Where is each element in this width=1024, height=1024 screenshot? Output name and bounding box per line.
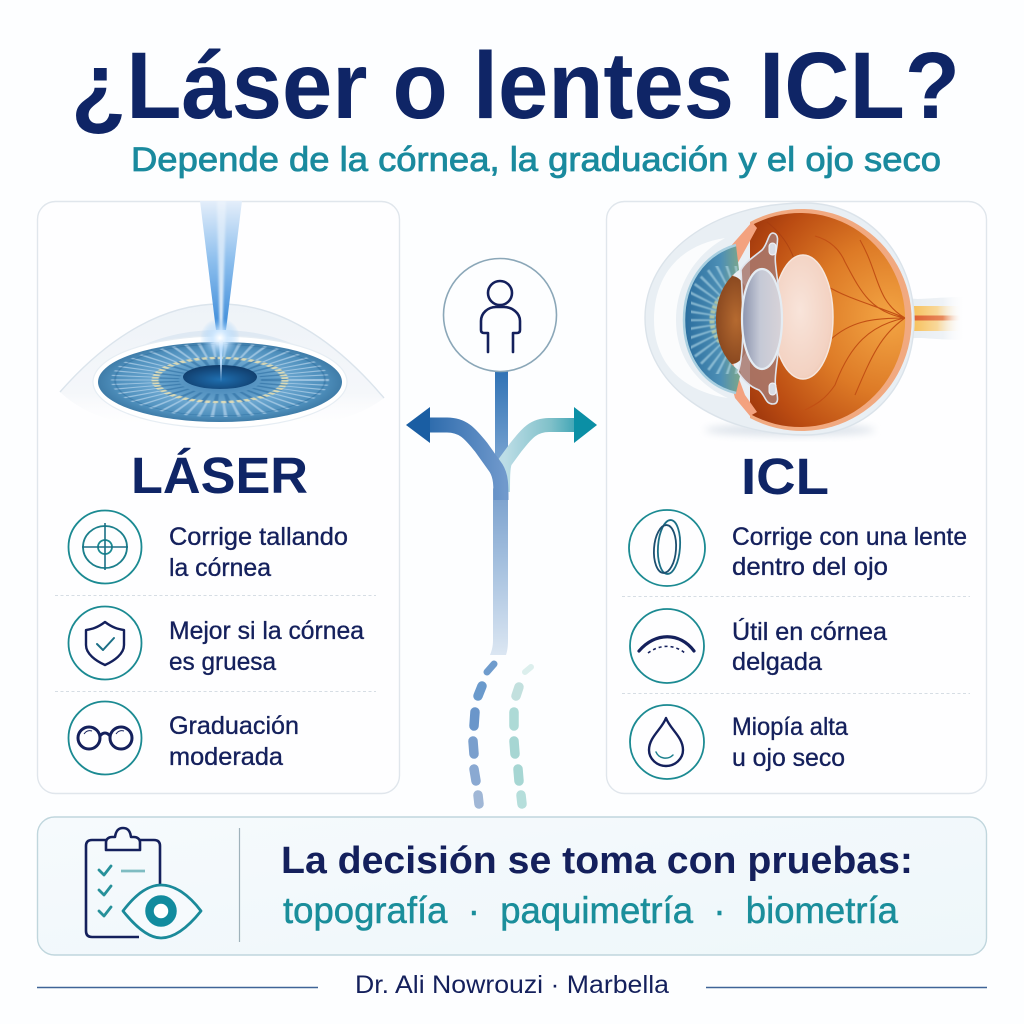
- text: corrige tallando: Corrige tallando: [169, 523, 348, 551]
- text: graduación moderada: [169, 712, 299, 771]
- text: útil en córnea: [732, 617, 887, 676]
- text: mejor si la córnea: [169, 617, 364, 676]
- text: miopía alta: Miopía alta: [732, 713, 848, 741]
- text: decision: La decisión se toma con pruebas:: [281, 840, 913, 882]
- heading: láser: LÁSER: [131, 447, 308, 504]
- text: corrige con una lente: Corrige con una lente: [732, 523, 967, 551]
- text: corrige con una lente: dentro del ojo: [732, 553, 888, 581]
- text: corrige tallando: la córnea: [169, 554, 271, 582]
- panel: icl: [606, 202, 986, 794]
- illustration: eye cross-section with ICL: [645, 203, 968, 436]
- title: ¿Láser o lentes ICL?: [71, 33, 960, 139]
- subtitle: Depende de la córnea, la graduación y el ojo seco: [131, 141, 941, 179]
- arrow: right to ICL: [503, 407, 597, 492]
- icon: drop: [630, 705, 704, 779]
- icon: glasses: [68, 702, 142, 774]
- lower stem: [490, 485, 508, 655]
- dashed path: blue: [473, 664, 494, 804]
- panel: láser: [38, 201, 400, 794]
- divider: [238, 828, 240, 942]
- icon: thin cornea: [630, 609, 704, 683]
- connector: person and branching arrows: [406, 258, 597, 804]
- text: útil en córnea: Útil en córnea: [732, 617, 887, 646]
- arrow: left to láser: [406, 407, 501, 500]
- icon: shield: [68, 606, 142, 680]
- text: corrige tallando: [169, 523, 348, 582]
- heading: icl: ICL: [741, 448, 829, 505]
- icon: clipboard and eye: [86, 828, 201, 938]
- illustration: laser on eye: [60, 201, 384, 432]
- text: mejor si la córnea: es gruesa: [169, 648, 276, 676]
- text: corrige con una lente: [732, 523, 967, 581]
- text: mejor si la córnea: Mejor si la córnea: [169, 617, 364, 645]
- footer credit: Dr. Ali Nowrouzi · Marbella: [355, 971, 669, 999]
- text: miopía alta: [732, 713, 848, 772]
- text: miopía alta: u ojo seco: [732, 744, 845, 772]
- dashed path: teal: [514, 667, 531, 804]
- banner: pruebas: [38, 817, 986, 955]
- person icon: [444, 258, 556, 372]
- icon: target: [68, 510, 142, 584]
- text: graduación moderada: Graduación: [169, 712, 299, 740]
- text: útil en córnea: delgada: [732, 648, 822, 676]
- text: graduación moderada: moderada: [169, 743, 283, 771]
- icon: lens: [629, 510, 705, 586]
- central stem: [495, 370, 508, 480]
- text: tests: topografía · paquimetría · biometría: [283, 890, 898, 931]
